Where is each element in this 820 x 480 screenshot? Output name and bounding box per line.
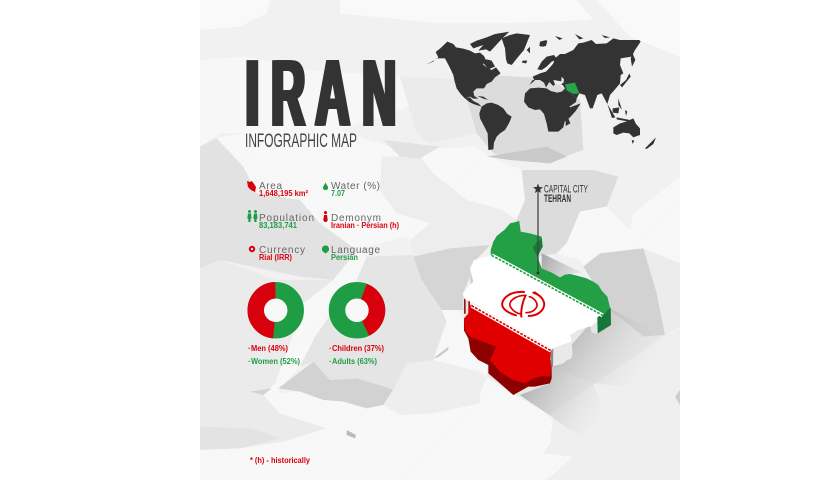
iran on world map [565, 83, 579, 94]
capital label [544, 184, 588, 205]
east [557, 207, 680, 335]
ornament: green band [492, 255, 603, 315]
grey sea, west [200, 138, 357, 280]
icon: population [247, 210, 258, 222]
extrusion: green side [597, 307, 611, 333]
stat: water: 7.07 [331, 189, 345, 198]
stat: demonym: Demonym [331, 213, 381, 224]
hatched strait [263, 250, 367, 395]
stats block [247, 181, 399, 262]
flag: white stripe [463, 256, 603, 348]
flag: green stripe [491, 221, 610, 316]
stat: currency: Currency [259, 245, 305, 256]
hatched land, south [200, 308, 573, 480]
icon: language [322, 246, 329, 254]
stat: area: Area [259, 181, 282, 192]
arctic islands [470, 32, 509, 69]
ornament: red band [472, 306, 551, 351]
stat: language: Language [331, 245, 380, 256]
stat: area: 1,648,195 km² [259, 189, 308, 198]
north america [426, 42, 501, 99]
central america and islands [465, 41, 547, 107]
title: N [360, 40, 394, 147]
icon: demonym [323, 211, 328, 222]
arabia [557, 90, 577, 107]
eurasia [529, 38, 641, 108]
legend: children and adults: · [329, 357, 332, 366]
stat: currency [259, 245, 305, 262]
capital label: TEHRAN [544, 193, 571, 205]
stat: language: Persian [331, 253, 358, 262]
icon: area [247, 181, 256, 192]
isometric map of Iran [463, 221, 611, 395]
stat: demonym [331, 213, 399, 230]
legend: men and women: Women (52%) [251, 357, 300, 366]
title: A [313, 40, 348, 147]
grey below world map [463, 75, 583, 163]
stat: water: Water (%) [331, 181, 380, 192]
greenland [502, 33, 530, 65]
donut chart: men and women [247, 282, 304, 339]
stat: water [331, 181, 380, 198]
stat: population: Population [259, 213, 314, 224]
icon: currency [250, 247, 254, 251]
title [241, 40, 396, 147]
legend: men and women: · [248, 344, 251, 353]
africa [524, 88, 581, 132]
title: R [269, 40, 303, 147]
stat: demonym: Iranian · Persian (h) [331, 221, 399, 230]
world map [426, 32, 656, 150]
australia [613, 118, 640, 144]
capital label: CAPITAL CITY [544, 184, 588, 196]
islands of asia and europe [522, 34, 635, 122]
south america [479, 103, 512, 150]
stat: currency: Rial (IRR) [259, 253, 292, 262]
grey sea, south centre [300, 255, 446, 389]
stat: area [259, 181, 308, 198]
legend: men and women: · [248, 357, 251, 366]
legend: men and women [248, 344, 300, 366]
legend: children and adults: · [329, 344, 332, 353]
extrusion: white side [552, 342, 573, 367]
capital pin [533, 184, 543, 274]
scandinavia [537, 55, 557, 70]
emblem [502, 292, 544, 317]
footnote: * (h) - historically [250, 456, 311, 465]
legend: children and adults: Children (37%) [332, 344, 384, 353]
seas [553, 77, 564, 84]
donut chart: children and adults [328, 282, 386, 339]
flag: red stripe [464, 305, 552, 383]
stat: population [259, 213, 314, 230]
legend: children and adults [329, 344, 384, 366]
extrusion: red side [464, 318, 552, 395]
stat: population: 83,183,741 [259, 221, 298, 230]
legend: men and women: Men (48%) [251, 344, 288, 353]
map shadow [520, 254, 638, 430]
icon: star [533, 184, 543, 193]
subtitle: INFOGRAPHIC MAP [245, 131, 357, 152]
stat: language [331, 245, 380, 262]
hatched land, north [217, 130, 525, 255]
panel: map background [200, 0, 680, 480]
icon: water drop [323, 182, 328, 190]
legend: children and adults: Adults (63%) [332, 357, 377, 366]
title: I [241, 40, 264, 147]
